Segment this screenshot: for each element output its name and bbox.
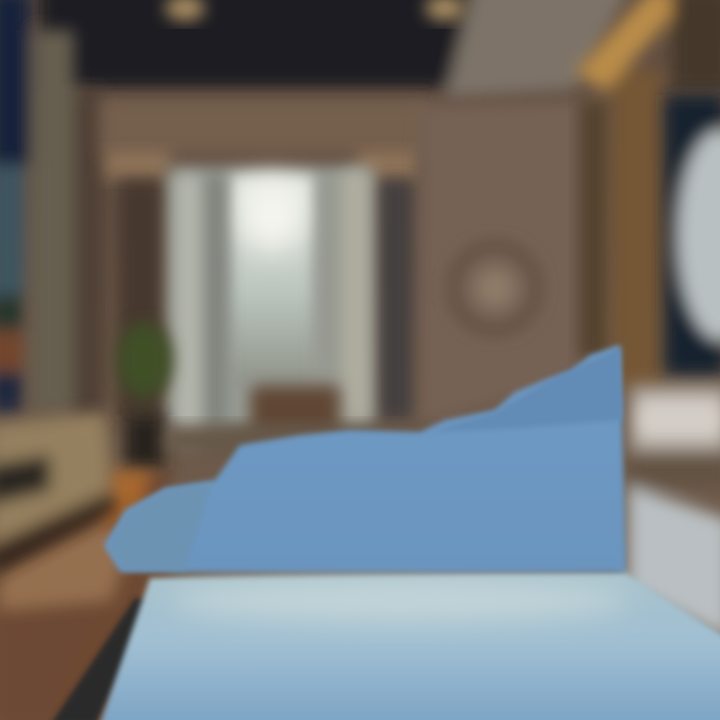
- chair by window: [250, 385, 340, 440]
- left dark wall and pillar: [0, 0, 104, 420]
- ceiling lights: [165, 0, 465, 21]
- upper back wall: [100, 98, 430, 153]
- left cabinet: [0, 412, 118, 578]
- plant: [117, 322, 173, 470]
- blue shape upper band: [430, 347, 622, 432]
- window glass: [168, 168, 373, 430]
- curtain pelmets: [105, 150, 418, 180]
- right white bedding: [628, 385, 720, 640]
- right window with view: [665, 95, 720, 375]
- wall medallion: [453, 246, 537, 330]
- blue shape lighter left edge: [108, 484, 212, 570]
- dark curtains: [118, 180, 414, 420]
- pale bed sheet: [98, 572, 720, 720]
- dark rug edge: [50, 598, 160, 720]
- ceiling: [40, 0, 635, 98]
- lower wall shade: [165, 425, 425, 455]
- floor: [0, 470, 170, 720]
- blue area shape: [104, 345, 626, 572]
- right wooden column and beam: [575, 0, 720, 390]
- window with curtains: [105, 150, 418, 445]
- right wall with medallion: [420, 100, 610, 425]
- sheet highlight: [170, 578, 630, 622]
- sheer panels: [176, 170, 368, 445]
